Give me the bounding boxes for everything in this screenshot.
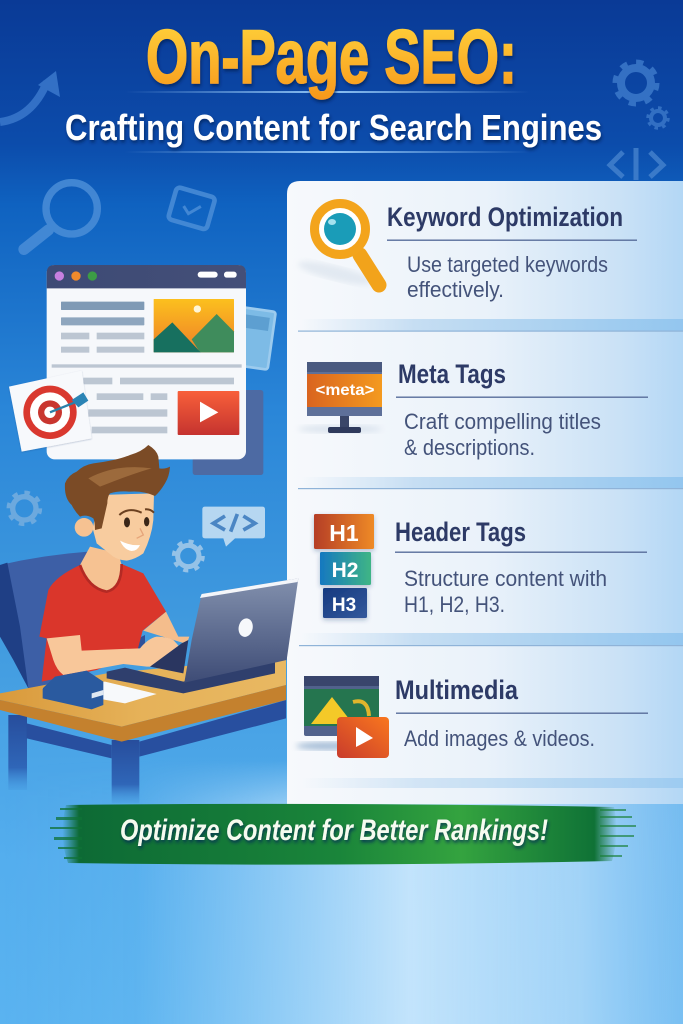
decorative icon: gear right [174,542,203,570]
description: H1, H2, H3. [404,592,505,617]
decorative icon: document behind window [230,307,276,370]
target card [9,371,92,452]
icon: heading blocks [314,514,374,618]
section divider: keyword and meta [298,319,683,332]
description [404,566,607,617]
description: Craft compelling titles [404,409,601,434]
decorative icon: small gear [648,108,668,128]
title line: On-Page SEO: On-Page SEO: [146,15,517,100]
icon: heading blocks: H3 [332,595,356,616]
decorative icon: growth arrow [0,71,60,122]
ear [75,518,93,537]
shirt collar [80,564,122,592]
video placeholder [178,391,239,435]
icon: heading blocks: H2 [332,559,358,582]
shirt [39,564,166,682]
apron [27,700,286,758]
laptop screen [184,578,298,683]
browser window [47,265,246,459]
keyboard shadow [150,640,188,673]
laptop [107,578,298,693]
description: & descriptions. [404,435,535,460]
panel background [287,181,683,804]
section: multimedia [296,675,648,758]
near arm [47,635,185,675]
icon: media window with video [296,676,389,758]
desk edge [0,685,286,742]
front leg [112,740,139,803]
section: keyword optimization [296,202,637,302]
title [65,15,602,153]
desktop [0,657,286,727]
banner text: Optimize Content for Better Rankings! [120,814,548,847]
image placeholder [154,299,234,352]
title rule: upper [125,91,530,93]
book stack [43,671,103,709]
nose [137,528,143,538]
eyebrows [119,509,154,515]
decorative icon: gear left [9,493,40,524]
icon: heading blocks: H1 [329,520,359,546]
neck [80,547,122,591]
face [93,493,154,561]
back leg [8,715,27,790]
smile [120,541,140,551]
text placeholder lines [52,302,242,433]
person [39,445,189,682]
dark card behind window [193,390,263,475]
section: header tags [314,514,647,618]
icon: magnifying glass [296,204,379,289]
heading: Header Tags [395,517,526,547]
description [404,409,601,460]
decorative icon: checkbox [168,187,215,230]
window controls [55,271,237,281]
hair [65,445,170,530]
description: Use targeted keywords [407,252,608,277]
far arm [143,612,189,644]
chair [0,552,145,688]
brush stroke [50,804,636,865]
section divider: meta and header [298,477,683,489]
decorative icon: code brackets [610,148,663,180]
decorative icon: magnifier [24,183,97,249]
section divider: header and multimedia [299,633,683,646]
eyes [124,517,149,527]
paper [42,682,157,703]
illustration: person at desk [0,445,298,803]
icon: meta monitor: <meta> [316,382,374,399]
description [407,252,608,302]
banner: call to action [50,804,636,865]
description: Add images & videos. [404,726,595,751]
section divider: bottom [300,778,683,788]
heading: Multimedia [395,675,519,705]
description: effectively. [407,277,504,302]
decorative icon: code bubble [202,507,265,547]
heading: Meta Tags [398,359,506,389]
description: Structure content with [404,566,607,591]
laptop logo [237,617,254,638]
title rule: lower [125,151,530,153]
laptop base [107,660,275,693]
desk [0,657,286,803]
section: meta tags [298,359,648,460]
heading: Keyword Optimization [387,202,623,232]
subtitle: Crafting Content for Search Engines [65,107,602,148]
icon: meta monitor [298,362,382,433]
panel: topics [287,181,683,804]
decorative icon: large gear [616,63,656,103]
illustration: web page scene [9,183,276,475]
